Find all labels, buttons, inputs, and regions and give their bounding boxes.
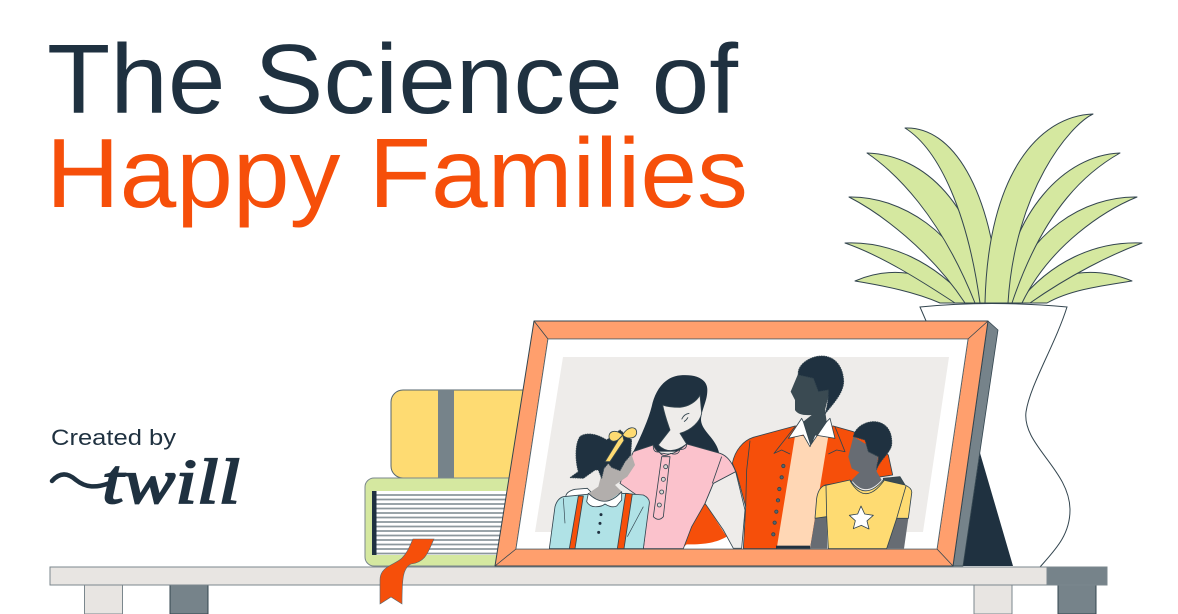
mother's face — [658, 395, 702, 451]
credit: created by twill: twill — [102, 446, 240, 517]
plant — [845, 114, 1142, 303]
boy's t-shirt — [815, 480, 912, 549]
father's head — [791, 373, 830, 445]
frame side — [953, 321, 998, 566]
dress placket — [653, 457, 670, 519]
girl's head — [588, 452, 635, 505]
photo mat — [516, 339, 968, 549]
father's jacket buttons — [772, 464, 785, 536]
boy's star — [849, 506, 873, 529]
title: Happy Families — [46, 118, 748, 228]
boy's head — [848, 437, 882, 489]
boy's arms — [810, 517, 827, 549]
credit: created by twill — [51, 425, 240, 517]
girl's shirt — [549, 493, 649, 549]
mother's arm — [705, 472, 745, 548]
girl's suspenders — [569, 493, 632, 549]
photo background — [535, 357, 949, 532]
father's shirt — [777, 436, 828, 549]
girl's hair — [570, 430, 632, 478]
family portrait — [549, 356, 912, 549]
picture frame — [495, 321, 998, 566]
yellow book — [391, 390, 551, 478]
mother's dress — [620, 444, 736, 549]
boy's hair — [853, 422, 892, 469]
vase — [920, 304, 1070, 567]
father's collar — [788, 418, 835, 447]
father's hair — [798, 356, 844, 414]
girl — [549, 428, 649, 549]
girl's collar — [587, 492, 622, 507]
bookmark ribbon — [380, 539, 434, 604]
mother's hair — [633, 375, 719, 454]
boy — [810, 422, 912, 549]
title — [46, 24, 748, 228]
father's back jacket piece — [682, 502, 727, 549]
green book — [365, 478, 535, 566]
credit: created by twill: Created by — [51, 425, 176, 450]
dress collar — [653, 444, 687, 456]
father's jacket — [732, 426, 893, 549]
girl's hand — [566, 488, 591, 498]
shelf — [50, 567, 1107, 614]
girl's buttons — [597, 513, 602, 534]
frame border — [495, 321, 988, 566]
boy's hand — [883, 477, 905, 485]
girl's hair bow — [605, 428, 637, 462]
title: The Science of — [47, 24, 739, 134]
frame stand — [963, 453, 1013, 566]
